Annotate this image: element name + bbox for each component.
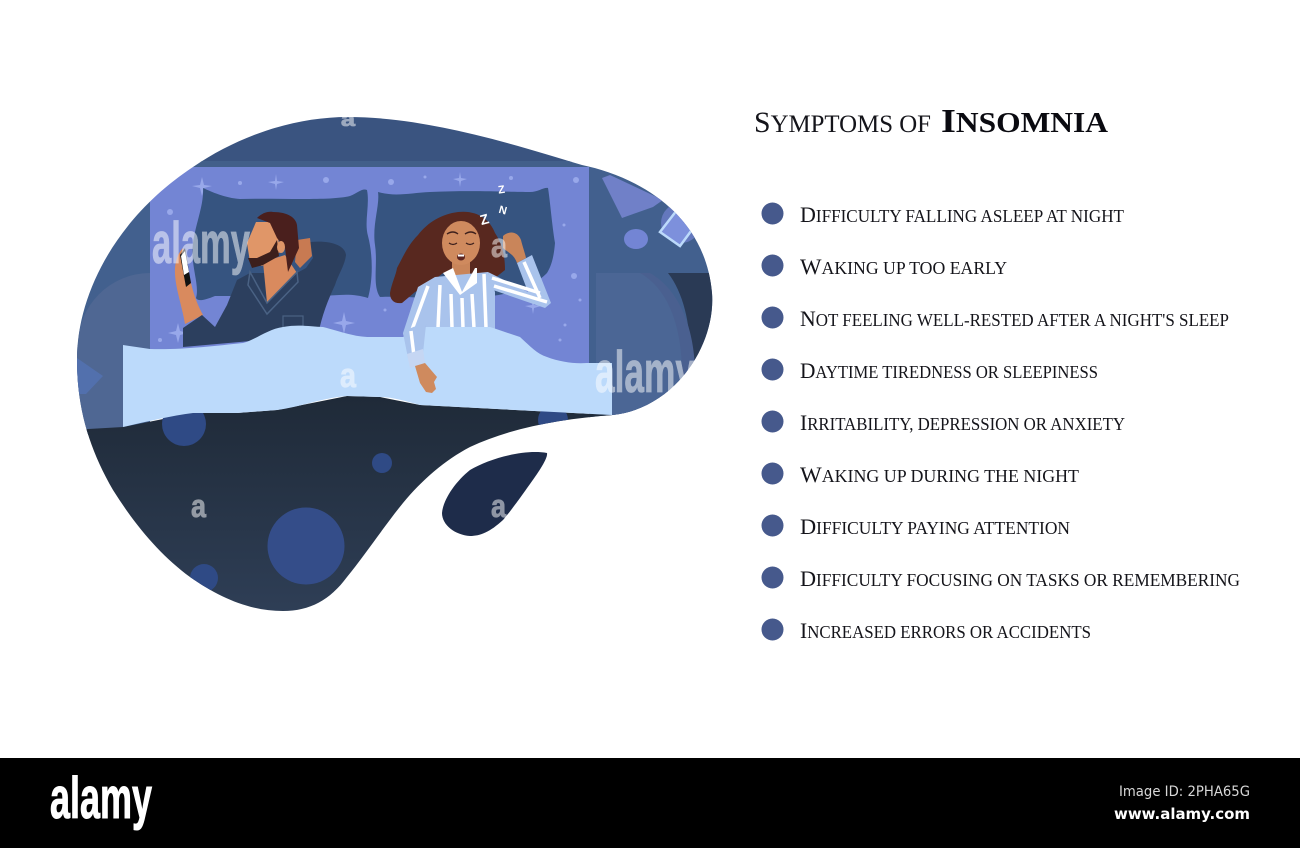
pillow: left bbox=[192, 188, 372, 300]
watermarks: alamy bbox=[595, 340, 695, 405]
footer logo: alamy bbox=[50, 766, 152, 831]
woman: face bbox=[442, 221, 480, 265]
man: pyjama bbox=[183, 242, 346, 347]
woman: arm over blanket bbox=[403, 325, 437, 393]
man: hand behind head bbox=[295, 238, 312, 268]
item 2: WAKING UP TOO EARLY bbox=[800, 254, 1007, 279]
man: pocket bbox=[283, 316, 303, 328]
top wall band bbox=[200, 117, 572, 162]
item 7: DIFFICULTY PAYING ATTENTION bbox=[800, 514, 1070, 539]
icon: phone bbox=[658, 207, 694, 248]
left bedside area bbox=[77, 202, 150, 435]
watermarks: a bbox=[491, 227, 508, 265]
stars on sheet bbox=[158, 172, 582, 343]
title: INSOMNIA bbox=[941, 103, 1109, 140]
floor bbox=[70, 396, 612, 620]
woman: facial features bbox=[447, 232, 476, 260]
title: SYMPTOMS OF bbox=[754, 106, 931, 139]
man: arm skin and hand bbox=[175, 248, 203, 324]
man: phone bbox=[180, 248, 191, 287]
watermarks: a bbox=[340, 357, 357, 395]
woman: pyjama top bbox=[425, 272, 495, 330]
icon: book bbox=[602, 175, 663, 218]
watermarks: a bbox=[341, 109, 356, 131]
watermarks bbox=[152, 109, 695, 524]
man: ear bbox=[277, 241, 285, 253]
item 5: IRRITABILITY, DEPRESSION OR ANXIETY bbox=[800, 410, 1125, 435]
woman: stripes bbox=[410, 261, 548, 328]
footer image id: Image ID: 2PHA65G bbox=[1119, 784, 1250, 800]
woman bbox=[390, 212, 551, 336]
footer url: www.alamy.com bbox=[1114, 805, 1250, 823]
man: neck and chest bbox=[263, 255, 297, 303]
man: collar bbox=[248, 272, 298, 314]
man: hair bbox=[257, 212, 299, 272]
item 4: DAYTIME TIREDNESS OR SLEEPINESS bbox=[800, 358, 1098, 383]
symptom list bbox=[762, 202, 1240, 643]
item 8: DIFFICULTY FOCUSING ON TASKS OR REMEMBERING bbox=[800, 566, 1240, 591]
title bbox=[754, 103, 1109, 140]
man bbox=[175, 212, 346, 347]
zzz: N bbox=[497, 204, 508, 218]
woman: neck bbox=[452, 262, 470, 275]
watermarks: a bbox=[491, 488, 506, 524]
pillow: right bbox=[374, 188, 555, 298]
watermarks: alamy bbox=[152, 211, 250, 276]
teardrop bbox=[442, 452, 547, 536]
zzz: Z bbox=[497, 184, 506, 197]
item 9: INCREASED ERRORS OR ACCIDENTS bbox=[800, 618, 1091, 643]
woman: collar bbox=[443, 268, 477, 295]
item 3: NOT FEELING WELL-RESTED AFTER A NIGHT'S SLEEP bbox=[800, 306, 1229, 331]
blanket bbox=[123, 326, 612, 427]
icon: stone bbox=[624, 229, 648, 249]
bed sheet bbox=[150, 161, 589, 167]
man: face bbox=[247, 222, 280, 266]
item 1: DIFFICULTY FALLING ASLEEP AT NIGHT bbox=[800, 202, 1124, 227]
illustration: couple in bed inside blob bbox=[70, 110, 720, 620]
right bedside table bbox=[589, 160, 720, 418]
watermarks: a bbox=[191, 488, 206, 524]
footer bar bbox=[0, 758, 1300, 848]
woman: left sleeve bbox=[403, 277, 435, 336]
item 6: WAKING UP DURING THE NIGHT bbox=[800, 462, 1079, 487]
woman: raised arm hand bbox=[503, 233, 526, 263]
man: beard bbox=[248, 240, 279, 268]
woman: raised sleeve bbox=[488, 255, 551, 308]
woman: hair bbox=[390, 212, 505, 303]
zzz: Z bbox=[478, 210, 491, 228]
zzz bbox=[478, 184, 508, 228]
